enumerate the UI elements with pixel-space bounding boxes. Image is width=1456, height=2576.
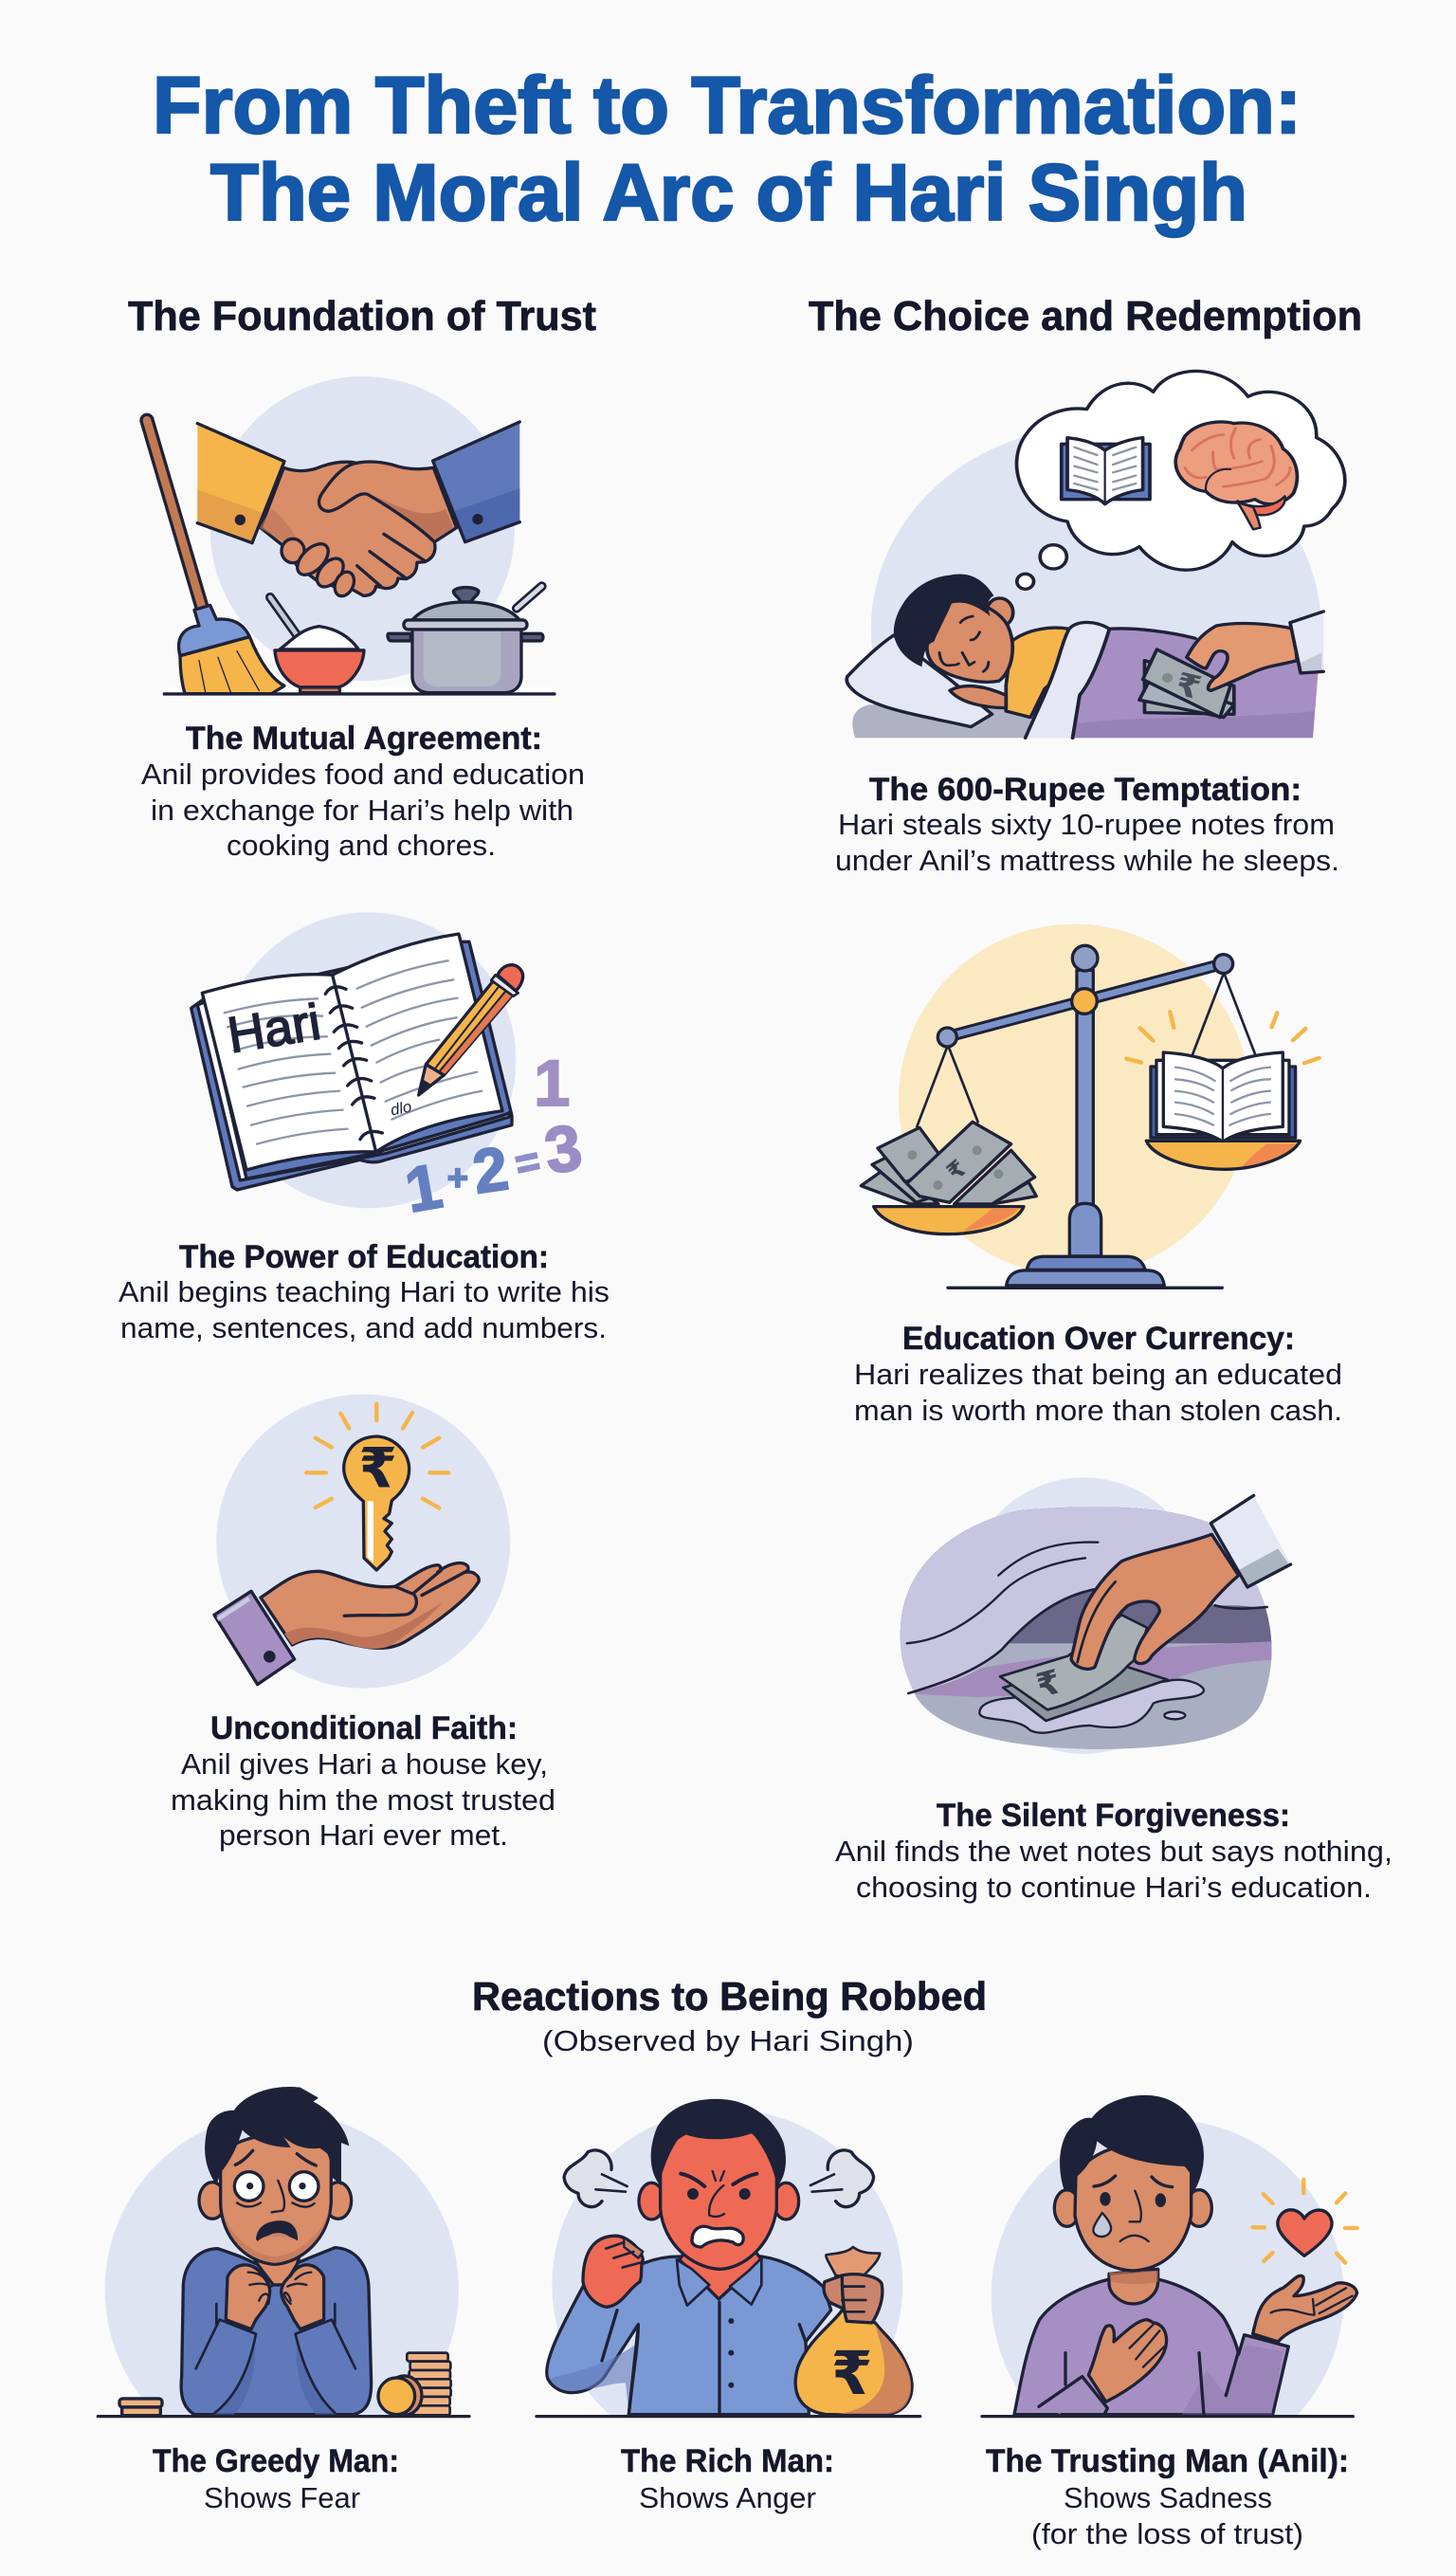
hand [1071, 1534, 1239, 1669]
pencil [426, 981, 514, 1075]
hands [226, 2265, 270, 2329]
sums: 1 [534, 1048, 570, 1120]
icon: rich man showing anger [535, 2099, 921, 2418]
hands [1088, 2320, 1167, 2402]
text: the mutual agreement: in exchange for Hari’s help with [151, 794, 573, 827]
text: the 600-rupee temptation: The 600-Rupee Temptation: [869, 772, 1301, 808]
heading: the foundation of trust: The Foundation of Trust [128, 293, 596, 339]
heading: reactions to being robbed: (Observed by Hari Singh) [542, 2024, 914, 2057]
body [181, 2248, 372, 2415]
head [987, 598, 1013, 627]
text: the power of education: Anil begins teaching Hari to write his [118, 1275, 610, 1308]
hand [261, 1563, 479, 1648]
base [1069, 1203, 1101, 1256]
text: unconditional faith: Unconditional Faith: [210, 1710, 518, 1746]
head [199, 2183, 226, 2219]
fist [583, 2236, 643, 2307]
text: the silent forgiveness: choosing to continue Hari’s education. [856, 1871, 1372, 1904]
smoke [564, 2150, 611, 2207]
heading: the choice and redemption: The Choice and Redemption [809, 293, 1362, 339]
sums: 2 [468, 1133, 512, 1206]
icon: sleeping Anil, thought cloud, hand taking notes: ₹ [1171, 666, 1205, 707]
heading: reactions to being robbed [472, 1974, 987, 2057]
money bag [795, 2311, 912, 2415]
text: the 600-rupee temptation [835, 772, 1339, 877]
title: From Theft to Transformation: [153, 61, 1301, 150]
text: the 600-rupee temptation: under Anil’s mattress while he sleeps. [835, 844, 1339, 877]
notes [1003, 1659, 1168, 1721]
text: unconditional faith: making him the most trusted [171, 1783, 555, 1817]
coins [119, 2399, 162, 2407]
sums: 1 [400, 1151, 447, 1227]
sums: + [447, 1158, 468, 1198]
text: education over currency: Education Over Currency: [902, 1321, 1295, 1357]
text: the trusting man: Shows Sadness [1064, 2481, 1272, 2514]
blanket and body [1006, 628, 1069, 718]
icon: handshake with broom, rice bowl and pot [147, 376, 555, 695]
title [153, 61, 1301, 237]
icon: greedy man showing fear [97, 2087, 471, 2418]
text: the trusting man [986, 2443, 1349, 2550]
hands [261, 462, 457, 595]
text: education over currency [854, 1321, 1342, 1427]
head [1054, 2190, 1080, 2226]
text: the greedy man: Shows Fear [204, 2481, 360, 2514]
body [1014, 2279, 1288, 2415]
title: The Moral Arc of Hari Singh [210, 148, 1247, 237]
panel: reactions to being robbed [98, 1974, 1357, 2550]
text: unconditional faith: Anil gives Hari a house key, [181, 1747, 548, 1781]
money pile [861, 1164, 938, 1204]
broom [147, 420, 202, 609]
text: the power of education: The Power of Education: [179, 1239, 549, 1275]
panel: the foundation of trust [118, 293, 610, 1852]
sums [400, 1048, 586, 1227]
text: the 600-rupee temptation: Hari steals sixty 10-rupee notes from [838, 808, 1335, 841]
icon: balance scale, money versus book [861, 924, 1320, 1288]
heading: reactions to being robbed: Reactions to Being Robbed [472, 1974, 987, 2019]
icon: sleeping Anil, thought cloud, hand taking notes [845, 370, 1347, 740]
text: the silent forgiveness: Anil finds the wet notes but says nothing, [835, 1835, 1392, 1868]
text: the rich man: Shows Anger [639, 2481, 816, 2514]
puddle [979, 1680, 1204, 1733]
body [547, 2256, 831, 2415]
text: the rich man [621, 2443, 834, 2514]
text: the mutual agreement: cooking and chores. [227, 829, 496, 862]
icon: hand finding wet notes under the mattress [882, 1470, 1299, 1754]
text: the trusting man: The Trusting Man (Anil): [986, 2443, 1349, 2479]
text: unconditional faith [171, 1710, 555, 1852]
cuffs [197, 424, 284, 543]
heart [1278, 2210, 1332, 2256]
book in cloud [1062, 444, 1150, 500]
icon: notebook with the name Hari, pencil and sums: dlo [389, 1097, 413, 1120]
text: the power of education [118, 1239, 610, 1344]
icon: balance scale, money versus book: ₹ [941, 1154, 972, 1186]
head [639, 2183, 664, 2220]
pot [517, 586, 542, 609]
text: the mutual agreement: Anil provides food and education [141, 758, 585, 791]
text: the rich man: The Rich Man: [621, 2443, 834, 2479]
book on scale [1151, 1067, 1296, 1138]
sums: 3 [540, 1111, 586, 1188]
text: the greedy man: The Greedy Man: [153, 2443, 399, 2479]
text: education over currency: Hari realizes that being an educated [854, 1358, 1342, 1391]
collar [680, 2247, 761, 2299]
thought cloud [1017, 371, 1345, 570]
text: the trusting man: (for the loss of trust) [1031, 2517, 1303, 2550]
icon: notebook with the name Hari, pencil and sums: Hari [224, 995, 324, 1064]
text: the mutual agreement [141, 721, 585, 862]
pillow [852, 704, 1030, 738]
icon: rich man showing anger: ₹ [831, 2338, 873, 2408]
icon: hand finding wet notes under the mattress: ₹ [1032, 1663, 1065, 1706]
icon: hand receiving rupee key: ₹ [358, 1435, 397, 1500]
icon: trusting man showing sadness [980, 2095, 1359, 2418]
sums: = [511, 1139, 544, 1188]
bowl [270, 597, 297, 635]
text: the silent forgiveness: The Silent Forgiveness: [937, 1798, 1290, 1834]
brain [1175, 422, 1297, 504]
money [1144, 661, 1234, 714]
text: the silent forgiveness [835, 1798, 1392, 1904]
text: the power of education: name, sentences, and add numbers. [120, 1311, 607, 1344]
icon: hand receiving rupee key [214, 1395, 510, 1689]
hand [1187, 623, 1297, 690]
text: the greedy man [153, 2443, 399, 2514]
text: the mutual agreement: The Mutual Agreement: [186, 721, 542, 757]
text: unconditional faith: person Hari ever met. [219, 1818, 508, 1852]
panel: the choice and redemption [809, 293, 1392, 1904]
icon: notebook with the name Hari, pencil and sums [191, 912, 586, 1227]
text: education over currency: man is worth more than stolen cash. [854, 1394, 1342, 1427]
